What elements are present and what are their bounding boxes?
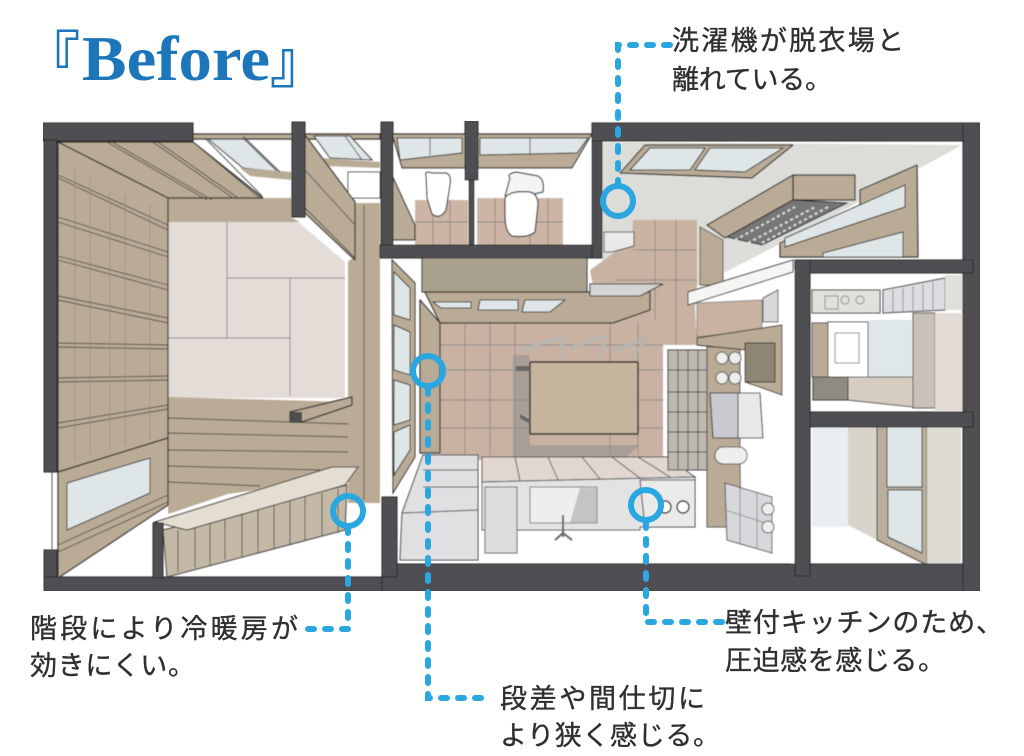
washroom tile column [913,313,935,408]
leader line [428,388,490,698]
callout text: 壁付キッチンのため、 [725,608,1003,638]
sink nook [348,172,380,198]
callout: washing machine [603,26,904,216]
partition wall [305,135,355,260]
rice container [715,447,747,464]
tile wall [440,220,697,460]
wood side [812,323,828,377]
glass block shelves [668,350,707,470]
bath door [877,427,927,565]
callout text: 効きにくい。 [30,651,195,681]
callout text: 洗濯機が脱衣場と [672,26,904,56]
right wood column [348,203,380,503]
ceiling [602,142,962,285]
panel: kitchen [392,142,962,560]
callout: level differences [413,356,720,751]
plates [716,352,741,384]
faucet [555,515,572,540]
lower left wood panel [58,438,168,578]
counter top [482,457,695,482]
washroom counter [848,377,913,407]
callout text: より狭く感じる。 [500,721,720,751]
washroom cabinets [812,290,880,313]
right high window [780,165,918,257]
bath right wall [927,427,961,578]
table [530,362,638,434]
washing machine [604,232,634,252]
bath wall [848,427,877,540]
callout text: 離れている。 [672,65,832,95]
leader line [646,522,722,622]
callout text: 階段により冷暖房が [30,614,298,644]
white wall [695,270,795,565]
ceiling joists [58,142,263,198]
small wall box [763,290,778,322]
stairs [163,485,347,577]
urinal [426,172,450,216]
callout text: 段差や間仕切に [500,684,705,714]
microwave [710,393,738,438]
panel: kitchen storage [620,145,918,565]
table shadow [513,355,640,458]
wood column [700,227,741,527]
floor plan illustration [43,121,980,591]
sink [530,487,597,523]
handrail [290,397,352,422]
title: 』 [270,30,328,95]
washroom right wall [935,313,963,411]
structural beams [43,121,980,591]
lower soffit [425,292,650,323]
skylight [620,145,793,178]
panel: washroom and bath [812,275,963,578]
marker ring [631,490,661,520]
leader line [305,527,348,629]
callout: stairs [30,496,363,681]
callout text: 圧迫感を感じる。 [725,646,945,676]
title [22,23,328,95]
small window [697,325,782,395]
marker ring [603,186,633,216]
bath window [812,427,848,527]
panel: left room [58,134,380,578]
toilet room windows [392,134,592,168]
tile floors [415,198,563,245]
marker ring [333,496,363,526]
panel: toilet rooms [392,134,592,245]
left window wall [392,260,415,493]
basin [828,322,868,377]
wall tiles [697,300,762,337]
wood floor [168,397,350,514]
rack [725,483,772,553]
marker ring [413,356,443,386]
toilet room wall [392,138,592,245]
top windows [207,138,278,172]
left wood wall [58,142,168,472]
toilet [505,172,543,196]
washing box [813,377,848,400]
lower left window [67,458,150,530]
shelf [688,260,793,305]
refrigerator block [400,455,478,560]
range hood [793,175,855,200]
title: Before [82,23,270,94]
leader line [618,45,670,186]
back wall [168,220,345,398]
title: 『 [22,27,80,92]
bulkhead [422,258,587,292]
counter front [482,477,695,530]
mirror [868,320,913,377]
chairs [520,336,648,358]
side wood [392,175,415,240]
back wall upper band [168,198,300,222]
stove [640,480,695,527]
callout: wall kitchen [631,490,1003,676]
